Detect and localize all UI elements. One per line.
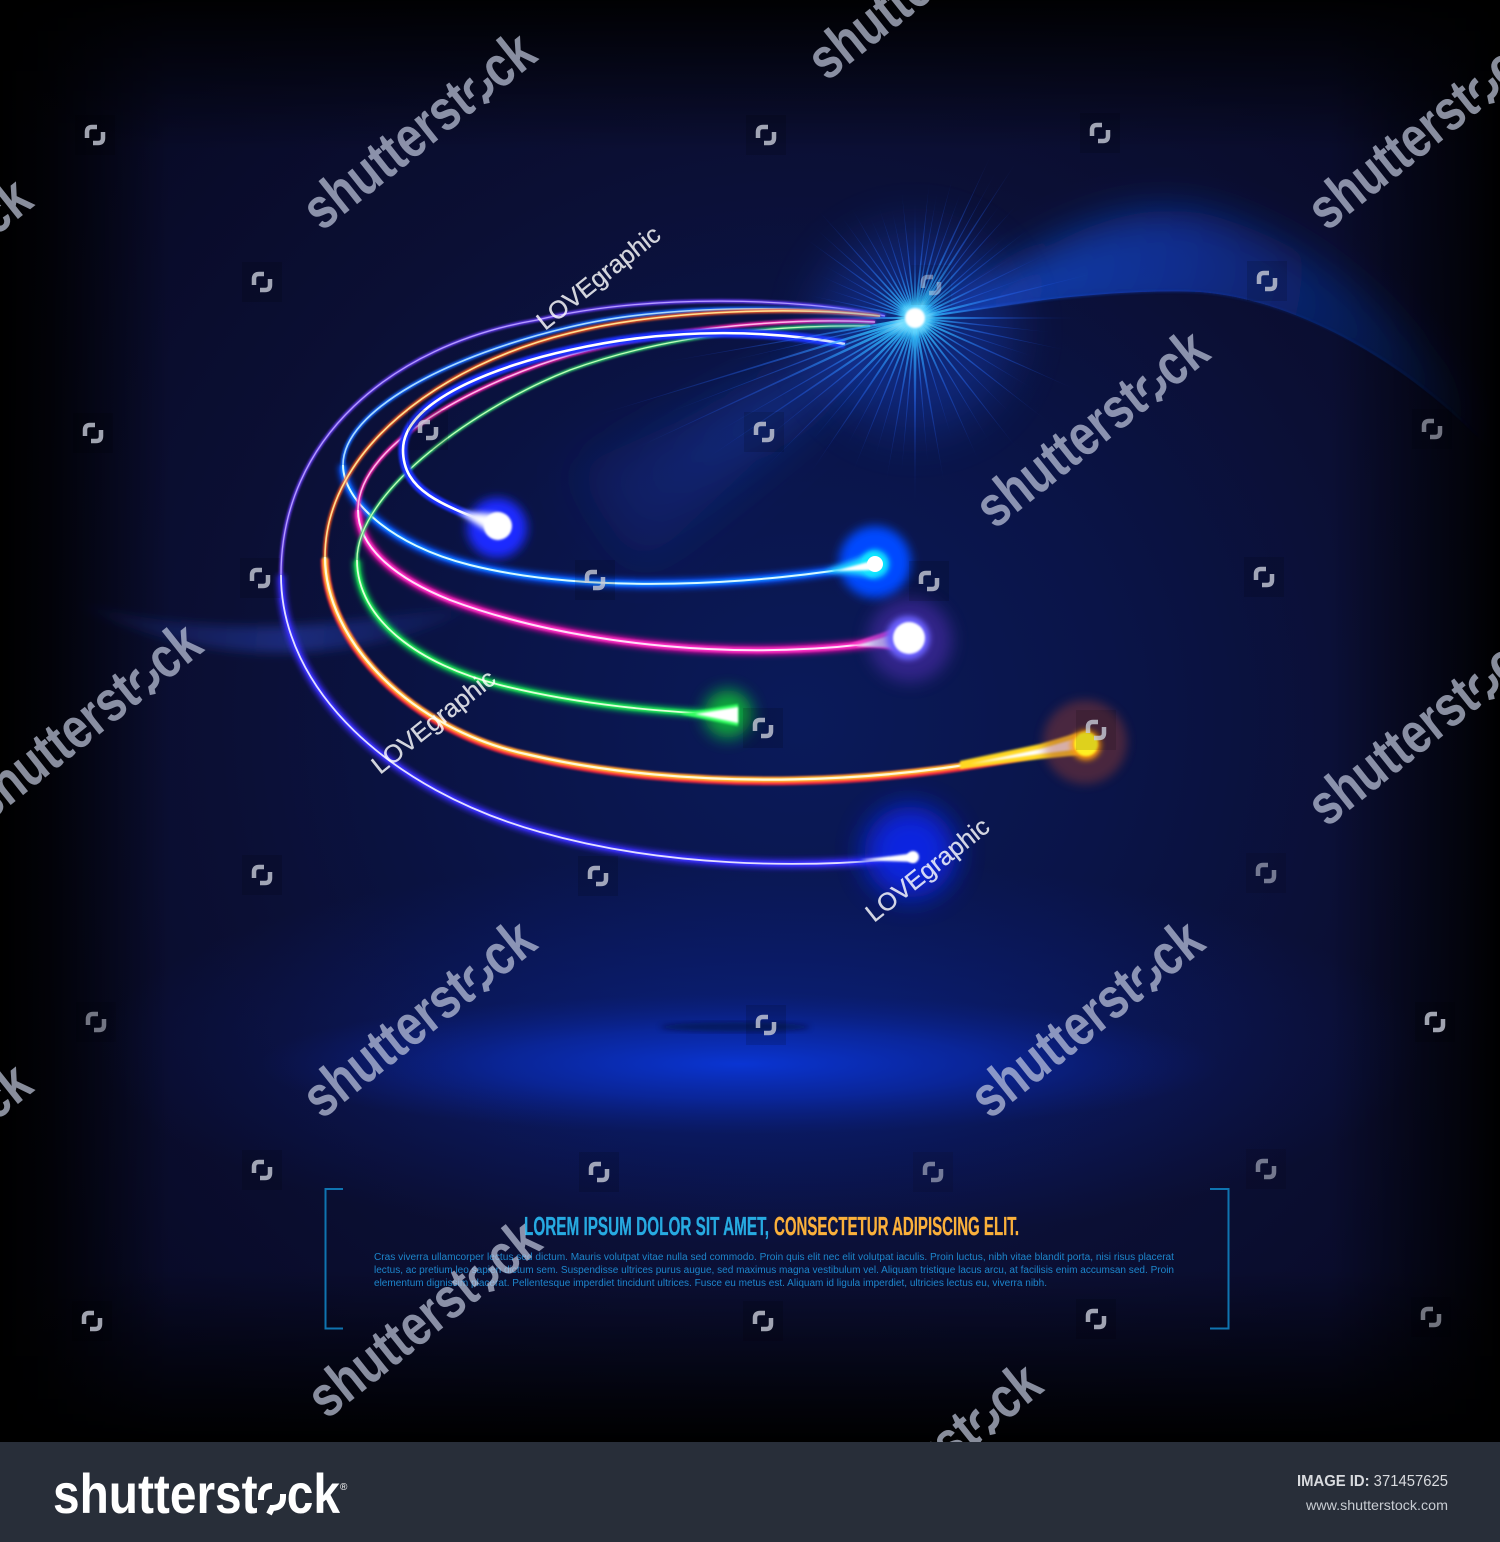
shutterstock diagonal watermarks: shutterstock	[958, 906, 1216, 1130]
trail: green	[357, 326, 870, 715]
footer logo: ®	[340, 1482, 348, 1493]
body text	[374, 1252, 1174, 1289]
LOVEgraphic watermarks	[366, 220, 995, 928]
body text: Cras viverra ullamcorper lectus sed dictum. Mauris volutpat vitae nulla sed commodo. Proin quis elit nec elit volutpat iaculis. Proin luctus, nibh vitae blandit porta, nisi risus placerat	[374, 1252, 1174, 1263]
endpoint glows	[458, 498, 1127, 898]
trail: short white-blue	[403, 333, 845, 526]
heading: LOREM IPSUM DOLOR SIT AMET,	[524, 1211, 769, 1241]
shutterstock diagonal watermarks: shutterstock	[290, 906, 548, 1130]
LOVEgraphic watermarks: LOVEgraphic	[531, 220, 666, 336]
shutterstock diagonal watermarks: shutterstock	[963, 316, 1221, 540]
trail: orange	[325, 311, 1090, 781]
body text: elementum dignissim placerat. Pellentesque imperdiet tincidunt ultrices. Fusce eu metus est. Aliquam id ligula imperdiet, ultricies lectus eu, viverra nibh.	[374, 1278, 1047, 1289]
trail: purple	[281, 301, 915, 864]
small watermark icons	[72, 113, 1455, 1341]
star burst	[589, 150, 1100, 508]
body text: lectus, ac pretium leo sapien dictum sem. Suspendisse ultrices purus augue, sed maximus magna vestibulum vel. Aliquam tristique lacus arcu, at facilisis enim accumsan sed. Proin	[374, 1265, 1174, 1276]
floor glow	[100, 855, 1420, 1245]
website: www.shutterstock.com	[1305, 1497, 1448, 1513]
shutterstock diagonal watermarks: shutterstock	[290, 18, 548, 242]
footer logo: shutterstock	[53, 1462, 341, 1525]
footer bar	[0, 1442, 1500, 1542]
trail: blue	[343, 309, 880, 584]
trail: magenta	[358, 321, 908, 652]
shutterstock diagonal watermarks: shutterstock	[295, 1206, 553, 1430]
beam from star	[570, 320, 905, 570]
text frame left bracket	[326, 1189, 343, 1328]
heading: CONSECTETUR ADIPISCING ELIT.	[774, 1211, 1019, 1241]
image id: IMAGE ID: 371457625	[1297, 1473, 1448, 1490]
LOVEgraphic watermarks: LOVEgraphic	[860, 812, 995, 928]
crescent glow top right	[932, 186, 1462, 421]
LOVEgraphic watermarks: LOVEgraphic	[366, 664, 501, 780]
text frame right bracket	[1210, 1189, 1228, 1328]
left faint arc	[70, 600, 480, 653]
